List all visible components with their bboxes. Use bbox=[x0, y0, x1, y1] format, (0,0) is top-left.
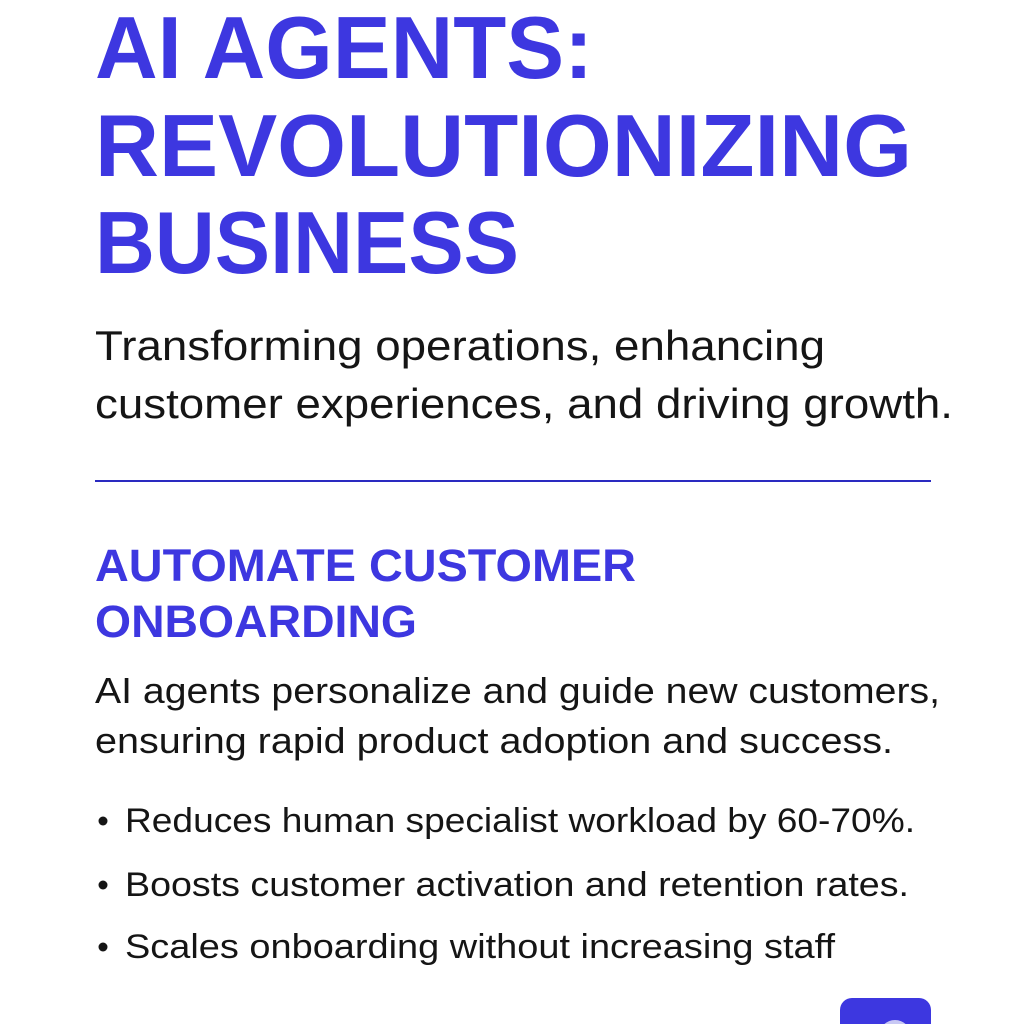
bullet list bbox=[98, 802, 915, 966]
title: AI AGENTS: bbox=[95, 0, 593, 97]
body text bbox=[95, 670, 940, 761]
section heading: AUTOMATE CUSTOMER bbox=[95, 540, 636, 591]
subtitle bbox=[95, 322, 953, 427]
bullet list: Reduces human specialist workload by 60-70%. bbox=[125, 802, 915, 840]
subtitle: Transforming operations, enhancing bbox=[95, 322, 825, 369]
title bbox=[95, 0, 912, 292]
icon: app badge bbox=[840, 998, 931, 1024]
section heading bbox=[95, 540, 636, 647]
bullet list: Scales onboarding without increasing staff bbox=[125, 928, 836, 966]
title: BUSINESS bbox=[95, 193, 519, 292]
bullet list: Boosts customer activation and retention rates. bbox=[125, 866, 909, 904]
body text: AI agents personalize and guide new customers, bbox=[95, 670, 940, 711]
subtitle: customer experiences, and driving growth. bbox=[95, 380, 953, 427]
title: REVOLUTIONIZING bbox=[95, 96, 912, 195]
body text: ensuring rapid product adoption and success. bbox=[95, 720, 893, 761]
section heading: ONBOARDING bbox=[95, 596, 417, 647]
